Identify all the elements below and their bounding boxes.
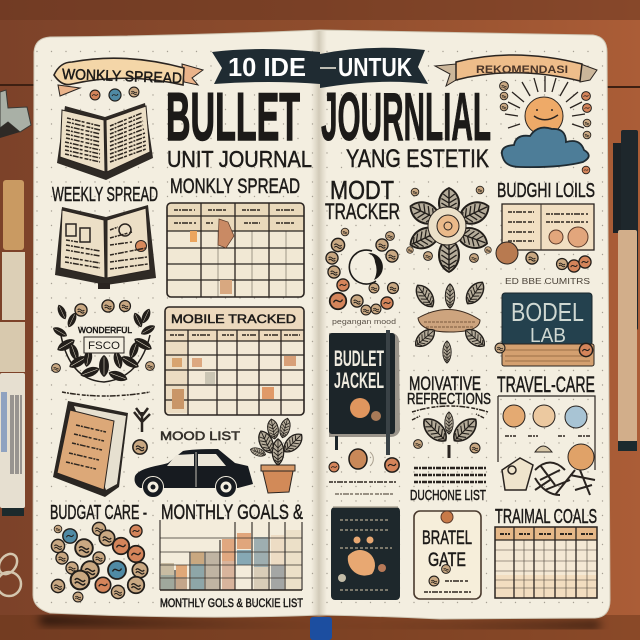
illustration: crescent moon doodles: pegangan mood [332, 319, 396, 326]
banner: UNTUK [320, 48, 428, 88]
label: mood list: MOOD LIST [160, 429, 241, 443]
icon: binder clip [0, 90, 31, 138]
ribbon: rekomendasi: REKOMENDASI [476, 64, 568, 76]
caption: budget logs: ED BBE CUMITRS [505, 277, 590, 286]
cloud [502, 128, 589, 167]
heading: weekly spread: WEEKLY SPREAD [52, 184, 158, 206]
illustration: floral wreath badge: FSCO [88, 340, 120, 352]
illustration: motivational leaves [412, 406, 488, 458]
illustration: leaf bowl doodle [412, 278, 488, 363]
icon: small doodles beside book [133, 408, 150, 454]
illustration: budget doodle cluster [51, 522, 148, 602]
heading: motivative reflections: REFRECTIONS [407, 391, 491, 408]
icon: dark pen on the right [613, 130, 638, 451]
text: BULLET [166, 79, 300, 155]
bars [161, 530, 301, 590]
text block: handwritten list: DUCHONE LIST [410, 487, 486, 504]
text block: handwritten list [410, 468, 486, 504]
heading: mood tracker [325, 175, 400, 224]
heading: mood tracker: TRACKER [325, 199, 400, 224]
heading: mood tracker: MODT [330, 175, 394, 205]
illustration: open book two [55, 205, 156, 289]
banner: 10 IDE: 10 IDE [228, 52, 306, 82]
caption: small text list [329, 482, 396, 494]
ribbon: weekly spread: WONKLY SPREAD [62, 66, 182, 87]
banner: UNTUK: UNTUK [338, 52, 412, 82]
illustration: tilted journal book [53, 401, 128, 497]
illustration: dark journal book: JACKEL [334, 368, 384, 393]
illustration: crescent moon doodles [326, 228, 398, 326]
banner: 10 IDE [212, 49, 320, 84]
icon: doodles around sun [500, 82, 591, 174]
bar chart: monthly goals [160, 520, 302, 592]
illustration: black car [135, 449, 253, 498]
panel: chalkboard: LAB [530, 325, 566, 347]
subtitle: yang estetik: YANG ESTETIK [346, 145, 489, 173]
illustration: dark journal book [329, 330, 400, 455]
panel: travel care [498, 396, 595, 495]
illustration: floral wreath badge [51, 300, 157, 396]
table: travel goals [495, 527, 597, 598]
calendar: mood tracker: MOBILE TRACKED [171, 312, 296, 326]
panel: price tag card: BRATEL [422, 528, 472, 549]
calendar: monthly spread [167, 203, 304, 297]
icon: blue pen tip [310, 617, 332, 640]
icon: egg doodle row [329, 449, 399, 472]
icon: paper clips [0, 550, 21, 596]
heading: budget logs: BUDGHI LOILS [497, 180, 595, 202]
panel: price tag card [414, 511, 481, 599]
ribbon: weekly spread [54, 58, 203, 96]
caption: monthly goals and bucket list: MONTHLY GOLS & BUCKIE LIST [160, 596, 304, 610]
panel: price tag card: GATE [428, 550, 466, 571]
ribbon: rekomendasi [435, 55, 597, 86]
panel: chalkboard [495, 293, 594, 366]
illustration: floral wreath badge: WONDERFUL [78, 326, 133, 335]
panel: budget logs page [496, 204, 594, 272]
heading: motivative reflections [407, 374, 491, 408]
illustration: large flower [406, 186, 493, 272]
illustration: potted plant [249, 417, 306, 493]
calendar: mood tracker [165, 307, 304, 415]
heading: monthly spread: MONKLY SPREAD [170, 175, 300, 198]
heading: monthly goals: MONTHLY GOALS & [161, 501, 303, 524]
subtitle: unit journal: UNIT JOURNAL [167, 146, 312, 172]
illustration: dark journal book: BUDLET [334, 346, 384, 371]
heading: motivative reflections: MOIVATIVE [409, 374, 481, 395]
icon: tan marker pen [0, 180, 25, 516]
illustration: dark book with moon [331, 507, 400, 600]
illustration: open book one [57, 103, 153, 180]
heading: budget care: BUDGAT CARE - [50, 502, 147, 524]
illustration: sun behind cloud [502, 76, 589, 167]
panel: chalkboard: BODEL [511, 297, 584, 327]
icon: small doodles above book [90, 87, 139, 101]
